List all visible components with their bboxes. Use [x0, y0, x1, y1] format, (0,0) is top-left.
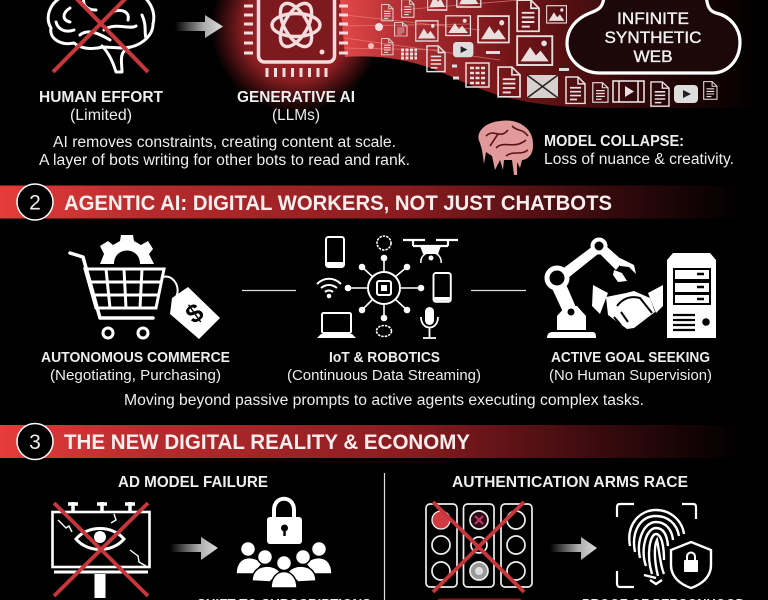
text: section 1 summary — [39, 134, 410, 169]
clipped red label — [438, 598, 521, 600]
cloud label — [604, 9, 702, 66]
label: autonomous commerce: AUTONOMOUS COMMERCE — [41, 349, 230, 366]
text: section 2 summary: Moving beyond passive prompts to active agents executing complex tasks. — [124, 392, 644, 409]
label: IoT and robotics: IoT & ROBOTICS — [329, 349, 440, 366]
icon: padlock and subscriber group — [236, 499, 332, 588]
label: generative AI: GENERATIVE AI — [237, 89, 355, 106]
arrow: effort to generative AI — [175, 15, 223, 38]
label: human effort: (Limited) — [70, 107, 132, 124]
cloud label: INFINITE — [617, 9, 689, 28]
label: generative AI — [237, 89, 355, 124]
icon: IoT hub and devices — [317, 236, 458, 338]
cloud label: WEB — [634, 47, 672, 66]
label: IoT and robotics — [287, 349, 481, 384]
heading: authentication arms race: AUTHENTICATION ARMS RACE — [452, 474, 688, 491]
text: model collapse — [544, 133, 734, 168]
label: autonomous commerce: (Negotiating, Purchasing) — [50, 367, 221, 384]
label: IoT and robotics: (Continuous Data Streaming) — [287, 367, 481, 384]
text: model collapse: Loss of nuance & creativity. — [544, 151, 734, 168]
banner: section 2: AGENTIC AI: DIGITAL WORKERS, NOT JUST CHATBOTS — [64, 192, 612, 215]
connector — [242, 290, 526, 292]
icon: fingerprint with shield — [617, 504, 711, 588]
label: generative AI: (LLMs) — [272, 107, 320, 124]
text: model collapse: MODEL COLLAPSE: — [544, 133, 684, 150]
arrow: ad model to subscriptions — [170, 537, 218, 560]
divider — [384, 473, 386, 600]
label: human effort — [39, 89, 163, 124]
label: autonomous commerce — [41, 349, 230, 384]
icon: cloud outline — [567, 0, 740, 73]
icon: shopping cart with gear and price tag — [70, 235, 220, 339]
arrow: CAPTCHA to proof of personhood — [550, 537, 597, 560]
icons: flood of synthetic content — [368, 0, 717, 106]
label: human effort: HUMAN EFFORT — [39, 89, 163, 106]
cloud label: SYNTHETIC — [604, 28, 702, 47]
icon: broken billboard crossed out — [52, 502, 150, 598]
icon: melting brain — [478, 120, 533, 175]
banner: section 2: 2 — [29, 192, 41, 214]
text: section 1 summary: A layer of bots writing for other bots to read and rank. — [39, 152, 410, 169]
banner: section 3: 3 — [29, 431, 41, 454]
icon: CAPTCHA panels crossed out — [426, 502, 532, 592]
icon: shopping cart with gear and price tag: $ — [180, 296, 209, 330]
icon: generative AI chip — [244, 0, 348, 77]
label: active goal seeking: (No Human Supervision) — [549, 367, 712, 384]
red data stream — [211, 0, 768, 113]
banner: section 3: THE NEW DIGITAL REALITY & ECONOMY — [64, 431, 470, 454]
label: active goal seeking: ACTIVE GOAL SEEKING — [551, 349, 710, 366]
text: section 1 summary: AI removes constraints, creating content at scale. — [53, 134, 396, 151]
icon: human brain crossed out — [48, 0, 154, 72]
label: active goal seeking — [549, 349, 712, 384]
icon: robot arm, handshake and server — [547, 240, 716, 338]
banner: section 2 — [0, 184, 740, 220]
banner: section 3 — [0, 424, 740, 460]
heading: ad model failure: AD MODEL FAILURE — [118, 474, 268, 491]
